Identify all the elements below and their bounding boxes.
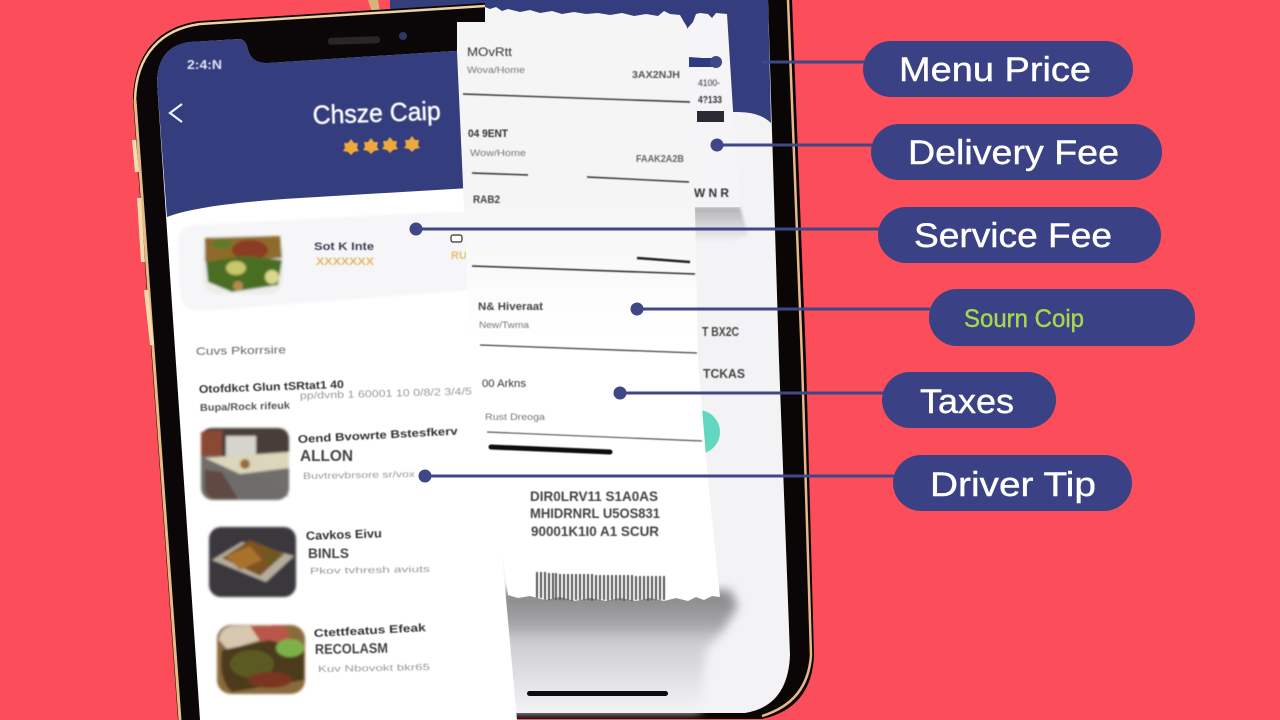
receipt section: sourn coip: New/Twma <box>479 320 529 330</box>
back phone frame <box>365 0 814 719</box>
app title: Chsze Caip <box>312 96 441 130</box>
receipt barcode <box>537 572 664 601</box>
receipt section: service: RAB2 <box>473 194 500 206</box>
main receipt <box>457 7 720 601</box>
pill: service fee <box>878 207 1161 263</box>
front phone <box>133 3 517 720</box>
item 1 photo <box>201 428 289 500</box>
small receipt: W N R <box>694 186 729 200</box>
receipt section: taxes: 00 Arkns <box>482 378 527 390</box>
item 3 photo <box>217 625 305 694</box>
list item 2: Cavkos Eivu <box>306 526 382 543</box>
home indicator <box>527 691 668 696</box>
receipt section: sourn coip <box>478 301 697 353</box>
receipt section: delivery: FAAK2A2B <box>636 154 684 165</box>
main receipt shadow <box>495 590 738 712</box>
connector: delivery fee <box>710 138 872 152</box>
back arrow <box>170 104 182 122</box>
list item 1 <box>201 426 459 500</box>
receipt totals: MHIDRNRL U5OS831 <box>530 505 660 521</box>
list item 1: Oend Bvowrte Bstesfkerv <box>298 426 459 446</box>
small receipt: 4?133 <box>698 95 722 106</box>
connector: menu price <box>690 56 864 68</box>
receipt section: delivery: 04 9ENT <box>468 128 508 140</box>
pill: sourn coip <box>929 289 1195 346</box>
pill: menu price <box>863 41 1133 97</box>
receipt paper <box>457 7 720 601</box>
pill: taxes: Taxes <box>920 383 1014 421</box>
front phone frame <box>133 3 485 720</box>
notch speaker <box>328 36 380 45</box>
receipt section: menu <box>463 45 690 102</box>
receipt section: taxes: Rust Dreoga <box>485 412 545 422</box>
receipt section: delivery <box>468 128 689 182</box>
food photo <box>203 236 283 294</box>
back phone screen <box>390 0 790 713</box>
pill: driver tip <box>893 455 1132 511</box>
receipt section: menu: 3AX2NJH <box>632 70 680 81</box>
back phone <box>365 0 814 719</box>
pill: delivery fee: Delivery Fee <box>908 134 1119 172</box>
receipt totals <box>530 488 660 539</box>
small receipt shadow <box>690 207 748 242</box>
list summary: pp/dvnb 1 60001 10 0/8/2 3/4/5 <box>300 386 473 402</box>
front phone screen <box>157 39 517 720</box>
green button <box>676 410 720 454</box>
list summary: Otofdkct Glun tSRtat1 40 <box>199 379 344 396</box>
featured restaurant card: XXXXXXX <box>316 256 375 268</box>
connector: taxes <box>614 386 883 400</box>
label text: fee value: T BX2C <box>702 324 739 339</box>
small receipt <box>686 13 740 207</box>
list item 3: Ctettfeatus Efeak <box>314 622 427 640</box>
receipt totals: 90001K1I0 A1 SCUR <box>531 523 659 539</box>
connector: service fee <box>410 222 879 236</box>
small receipt: 4100- <box>698 78 720 88</box>
pill: service fee: Service Fee <box>914 217 1112 255</box>
list item 2 <box>209 526 431 597</box>
receipt section: service <box>472 194 695 274</box>
pill: menu price: Menu Price <box>899 51 1091 89</box>
pill: taxes <box>882 372 1056 428</box>
featured restaurant card: Sot K Inte <box>314 241 374 253</box>
list item 3 <box>217 622 430 694</box>
receipt section: sourn coip: N& Hiveraat <box>478 301 543 313</box>
receipt section: menu: Wova/Home <box>467 65 525 75</box>
list item 3: Kuv Nbovokt bkr65 <box>318 662 430 674</box>
list item 1: ALLON <box>300 448 353 465</box>
list summary: Bupa/Rock rifeuk <box>200 401 291 414</box>
featured restaurant card: RU <box>451 250 467 262</box>
status time: 2:4:N <box>187 57 222 72</box>
list item 2: BINLS <box>308 545 349 561</box>
pill: delivery fee <box>871 124 1162 180</box>
rating stars <box>343 136 420 155</box>
receipt section: taxes <box>482 378 702 452</box>
callouts <box>410 41 1195 511</box>
connector: driver tip <box>418 470 894 482</box>
list item 1: Buvtrevbrsore sr/vox <box>303 469 416 481</box>
pill: driver tip: Driver Tip <box>930 466 1096 504</box>
item 2 photo <box>209 527 296 597</box>
list item 3: RECOLASM <box>315 640 388 657</box>
app header <box>157 39 470 217</box>
receipt section: delivery: Wow/Home <box>470 148 526 158</box>
label text: tax value: TCKAS <box>703 366 745 381</box>
receipt totals: DIR0LRV11 S1A0AS <box>530 488 658 504</box>
list summary <box>199 379 473 414</box>
receipt section: menu: MOvRtt <box>467 45 513 59</box>
list heading: Cuvs Pkorrsire <box>196 344 286 358</box>
pill: sourn coip: Sourn Coip <box>964 305 1084 333</box>
featured restaurant card <box>178 212 470 311</box>
connector: sourn coip <box>630 302 930 316</box>
notch camera <box>399 32 407 40</box>
list item 2: Pkov tvhresh aviuts <box>310 564 431 576</box>
